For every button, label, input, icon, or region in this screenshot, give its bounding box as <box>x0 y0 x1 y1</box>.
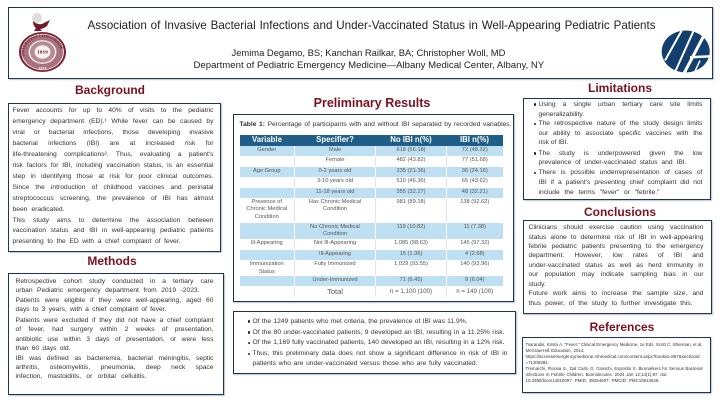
panel: references <box>522 337 711 393</box>
limitations list: There is possible underrepresentation of cases of <box>538 169 702 176</box>
background text: vaccination status and IBI in well-appearing pediatric patients <box>12 227 214 234</box>
conclusions text: Future work aims to increase the sample size, and <box>528 290 704 297</box>
data table: n = 1,100 (100) <box>390 288 432 295</box>
methods text: infection, mastoiditis, or orbital cellulitis. <box>16 373 146 380</box>
data table: Has Chronic Medical <box>309 199 361 205</box>
data table: 482 (43.82) <box>396 157 426 163</box>
background text: step in identifying those at risk for poor clinical outcomes. <box>12 173 214 180</box>
data table: 981 (89.18) <box>396 199 426 205</box>
data table: Variable <box>252 134 282 144</box>
background text <box>12 107 214 245</box>
limitations list <box>534 101 702 196</box>
data table: 11-18 years old <box>316 189 354 195</box>
results findings list: patients who are under-vaccinated versus those who are fully vaccinated. <box>252 360 478 367</box>
results findings list: Of the 1249 patients who met criteria, the prevalence of IBI was 11.9%. <box>252 318 468 325</box>
reference list: 10.3390/biom14010097. PMID: 38254697; PMCID: PMC10813546. <box>526 378 660 383</box>
data table: 510 (46.36) <box>396 178 426 184</box>
data table: 235 (21.36) <box>396 168 426 174</box>
data table: 618 (56.18) <box>396 147 426 153</box>
conclusions text <box>528 224 704 307</box>
data table: 138 (92.62) <box>460 199 489 205</box>
methods text: Patients were excluded if they did not have a chief complaint <box>16 317 214 324</box>
background text: risk factors for IBI, including vaccination status, is an essential <box>12 162 214 169</box>
data table: 355 (32.27) <box>396 189 426 195</box>
data table: Immunization <box>250 261 284 267</box>
data table: No Chronic Medical <box>310 224 360 230</box>
data table: Fully Immunized <box>314 261 356 267</box>
data table: 71 (6.45) <box>400 277 422 283</box>
limitations list: The retrospective nature of the study design limits <box>538 120 702 127</box>
methods text: urban Pediatric emergency department from 2019 -2023. <box>16 287 200 294</box>
icon: university seal: 1819 <box>37 50 48 55</box>
data table: Male <box>329 147 341 153</box>
header banner <box>8 7 713 79</box>
panel: results bullets <box>233 311 516 374</box>
limitations list: IBI if a patient's presenting chief complaint did not <box>538 179 702 186</box>
data table: 48 (32.21) <box>462 189 488 195</box>
results findings list: Of the 1,169 fully vaccinated patients, 140 developed an IBI, resulting in a 12% risk. <box>252 339 504 346</box>
methods text: Retrospective cohort study conducted in a tertiary care <box>16 278 214 285</box>
icon: university seal: UNIVERSITAS CONCORDIAE <box>21 34 64 56</box>
data table: Under-Immunized <box>312 277 358 283</box>
data table: Chronic Medical <box>246 206 287 212</box>
authors: Jemima Degamo, BS; Kanchan Railkar, BA; Christopher Woll, MD <box>232 46 505 58</box>
limitations list: our ability to associate specific vaccines with the <box>538 130 702 137</box>
background text: presenting to the ED with a chief complaint of fever. <box>12 238 180 245</box>
data table: Ill-Appearing <box>319 251 351 257</box>
reference list: Tremarchi, Rossia S., Dal Carlo G, Granchi, Esposito S. Biomarkers for Serious Bacterial <box>526 366 702 371</box>
data table: 72 (48.32) <box>462 147 488 153</box>
heading: References: References <box>590 320 654 334</box>
methods text: arthritis, osteomyelitis, pneumonia, deep neck space <box>16 364 214 371</box>
methods text: IBI was defined as bacteremia, bacterial meningitis, septic <box>16 355 214 362</box>
results findings list: Of the 80 under-vaccinated patients, 9 developed an IBI, resulting in a 11.25% risk. <box>252 329 504 336</box>
data table: 1,029 (93.55) <box>394 261 428 267</box>
reference list: https://accessemergencymedicine.mhmedical.com/content.aspx?bookid=897&sectionid <box>526 354 699 359</box>
data table: 15 (1.36) <box>400 251 422 257</box>
methods text <box>16 278 214 380</box>
panel: conclusions <box>523 220 712 314</box>
data table: 36 (24.16) <box>462 168 488 174</box>
affiliation: Department of Pediatric Emergency Medicine—Albany Medical Center, Albany, NY <box>194 60 544 70</box>
icon: university seal <box>19 13 66 72</box>
reference list: Tsarandis, Kirsta A. "Fever." Clinical Emergency Medicine, 1e Eds. Scott C. Sherman, et al. <box>526 342 702 346</box>
conclusions text: department. However, low rates of IBI and <box>528 252 704 259</box>
limitations list: risk of IBI. <box>538 139 568 146</box>
data table: IBI n(%) <box>460 134 489 144</box>
panel: results table <box>233 114 514 302</box>
conclusions text: febrile pediatric patients presenting to the emergency <box>528 243 704 250</box>
data table: 9 (6.04) <box>465 277 485 283</box>
reference list: Infections in Febrile Children. Biomolecules. 2024 Jan 12;14(1):97. doi: <box>526 372 668 377</box>
background text: Since the introduction of childhood vaccines and perinatal <box>12 184 214 191</box>
panel: limitations <box>523 98 711 200</box>
data table: Female <box>326 157 344 163</box>
background text: emergency department (ED).¹ While fever can be caused by <box>12 118 214 125</box>
conclusions text: our population may indicate sampling bias in our <box>528 271 704 278</box>
conclusions text: study. <box>528 281 546 288</box>
background text: streptococcus screening, the prevalence of IBI has almost <box>12 195 214 202</box>
data table: Status <box>259 269 275 275</box>
heading: Background: Background <box>75 83 145 97</box>
panel: methods <box>8 273 224 395</box>
results findings list <box>248 318 508 367</box>
icon: university seal: 1873 <box>38 66 46 69</box>
data table: Specifier? <box>316 134 354 144</box>
methods text: of fever, had surgery within 2 weeks of presentation, <box>16 326 214 333</box>
reference list: =71308384. <box>526 360 549 365</box>
heading: Preliminary Results: Preliminary Results <box>314 96 430 110</box>
methods text: Patients were eligible if they were well-appearing, aged 60 <box>16 297 214 304</box>
background text: bacterial infections (IBI) are at increased risk for <box>12 140 214 147</box>
background text: life-threatening complications². Thus, evaluating a patient's <box>12 151 214 158</box>
title: Association of Invasive Bacterial Infections and Under-Vaccinated Status in Well-Appearing Pediatric Patients <box>88 18 656 32</box>
limitations list: generalizability. <box>538 111 584 118</box>
data table: 11 (7.38) <box>464 224 486 230</box>
data table: 4 (2.68) <box>465 251 485 257</box>
limitations list: The study is underpowered given the low <box>538 150 702 157</box>
conclusions text: under-vaccinated status as well as herd immunity in <box>528 262 704 269</box>
heading: Conclusions: Conclusions <box>584 205 656 219</box>
icon: Albany Medical Center logo <box>662 30 710 72</box>
reference list: McGraw-Hill Education, 2014, <box>526 348 584 353</box>
background text: Fever accounts for up to 40% of visits to the pediatric <box>12 107 214 114</box>
data table: Condition <box>323 206 347 212</box>
data table: Age Group <box>253 168 280 174</box>
methods text: antibiotic use within 3 days of presentation, or were less <box>16 336 214 343</box>
data table: Condition <box>255 214 279 220</box>
conclusions text: status alone to determine risk of IBI in well-appearing <box>528 234 704 241</box>
methods text: than 60 days old. <box>16 345 70 352</box>
data table: Presence of <box>252 199 282 205</box>
background text: been eradicated. <box>12 206 64 213</box>
data table: 65 (43.62) <box>462 178 488 184</box>
background text: This study aims to determine the association between <box>12 217 214 224</box>
data table: Total <box>327 287 343 296</box>
reference list <box>526 342 702 383</box>
data table: Condition <box>323 231 347 237</box>
results findings list: Thus, this preliminary data does not show a significant difference in risk of IBI in <box>252 350 508 357</box>
data table: n = 149 (100) <box>456 288 493 295</box>
data table: Gender <box>257 147 276 153</box>
data table: Not Ill-Appearing <box>314 240 356 246</box>
data table: 3-10 years old <box>317 178 353 184</box>
limitations list: include the terms "fever" or "febrile." <box>538 189 660 196</box>
table caption: Table 1: Percentage of participants with and without IBI separated by recorded variables. <box>240 120 512 128</box>
data table <box>240 134 503 297</box>
data table: Ill-Appearing <box>251 240 283 246</box>
background text: viral or bacterial infections, those developing invasive <box>12 129 214 136</box>
heading: Limitations: Limitations <box>588 81 652 95</box>
panel: background <box>8 103 221 252</box>
data table: No IBI n(%) <box>390 134 432 144</box>
conclusions text: thus power, of the study to further investigate this. <box>528 300 692 307</box>
data table: 140 (93.96) <box>460 261 489 267</box>
limitations list: prevalence of under-vaccinated status and IBI. <box>538 159 686 166</box>
data table: 0-2 years old <box>319 168 351 174</box>
conclusions text: Clinicians should exercise caution using vaccination <box>528 224 704 231</box>
limitations list: Using a single urban tertiary care site limits <box>538 101 702 108</box>
heading: Methods: Methods <box>87 254 137 268</box>
data table: 1,085 (98.63) <box>394 240 428 246</box>
data table: 77 (51.68) <box>462 157 488 163</box>
methods text: days to 3 years, with a chief complaint of fever. <box>16 306 166 313</box>
data table: 145 (97.32) <box>460 240 489 246</box>
data table: 119 (10.82) <box>397 224 425 230</box>
